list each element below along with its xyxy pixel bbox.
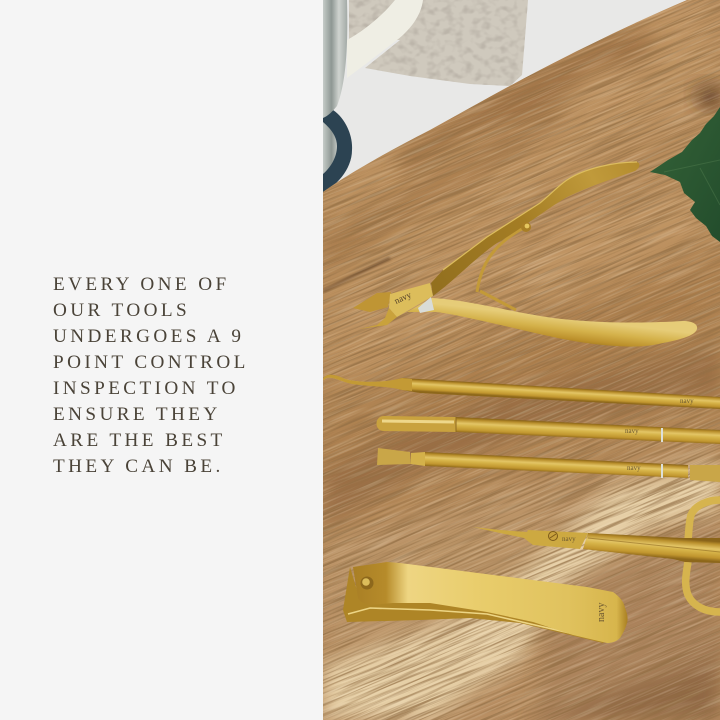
wood grain: fine diagonal streaks [494,374,546,426]
clipper: upper lever [353,562,628,643]
text block: inspection statement: ARE THE BEST [53,430,226,451]
cup: white ceramic mug [347,0,423,78]
vase base: dark blue foot [323,110,352,192]
logo: scissors engraving: navy [562,535,576,543]
text block: inspection statement [53,274,249,477]
text block: inspection statement: UNDERGOES A 9 [53,326,244,347]
nipper: jaws and joint [353,292,391,312]
text block: inspection statement: THEY CAN BE. [53,456,224,477]
panel: text panel [0,0,323,720]
clipper: rivet [360,576,374,590]
background: white table surface [323,0,720,200]
text block: inspection statement: POINT CONTROL [53,352,249,373]
text block: inspection statement: OUR TOOLS [53,300,190,321]
text block: inspection statement: INSPECTION TO [53,378,239,399]
nipper: engraved logo: navy [393,289,413,306]
text block: inspection statement: ENSURE THEY [53,404,221,425]
nipper: spring [477,227,525,310]
nipper: upper handle [431,162,639,296]
logo: probe engraving: navy [680,397,694,405]
vase: silver glass body [323,0,347,174]
logo: clipper engraving: navy [596,603,607,622]
text block: inspection statement: EVERY ONE OF [53,274,230,295]
tool: rounded pusher [376,416,720,444]
scissors: finger rings [686,500,720,612]
leaf: green serrated leaf [650,107,720,242]
wooden board [323,0,720,720]
panel: photo of gold manicure tools on a wooden board [323,0,720,720]
scissors: head and blades [473,527,588,549]
scissors: shaft [583,533,720,563]
logo: flat pusher engraving: navy [627,464,641,472]
clipper: lower lever [343,567,627,643]
nipper: lower handle [407,298,697,347]
tool: cuticle scissors [473,500,720,612]
tool: hooked probe [323,375,720,409]
nipper: pivot [521,222,531,232]
wood tone: broad grain zones [323,0,720,720]
tool: nail clipper [343,562,628,643]
logo: pusher engraving: navy [625,427,639,435]
cloth: knitted towel [349,0,530,86]
tool: cuticle nipper [353,162,697,347]
tool: flat pusher [377,448,720,482]
